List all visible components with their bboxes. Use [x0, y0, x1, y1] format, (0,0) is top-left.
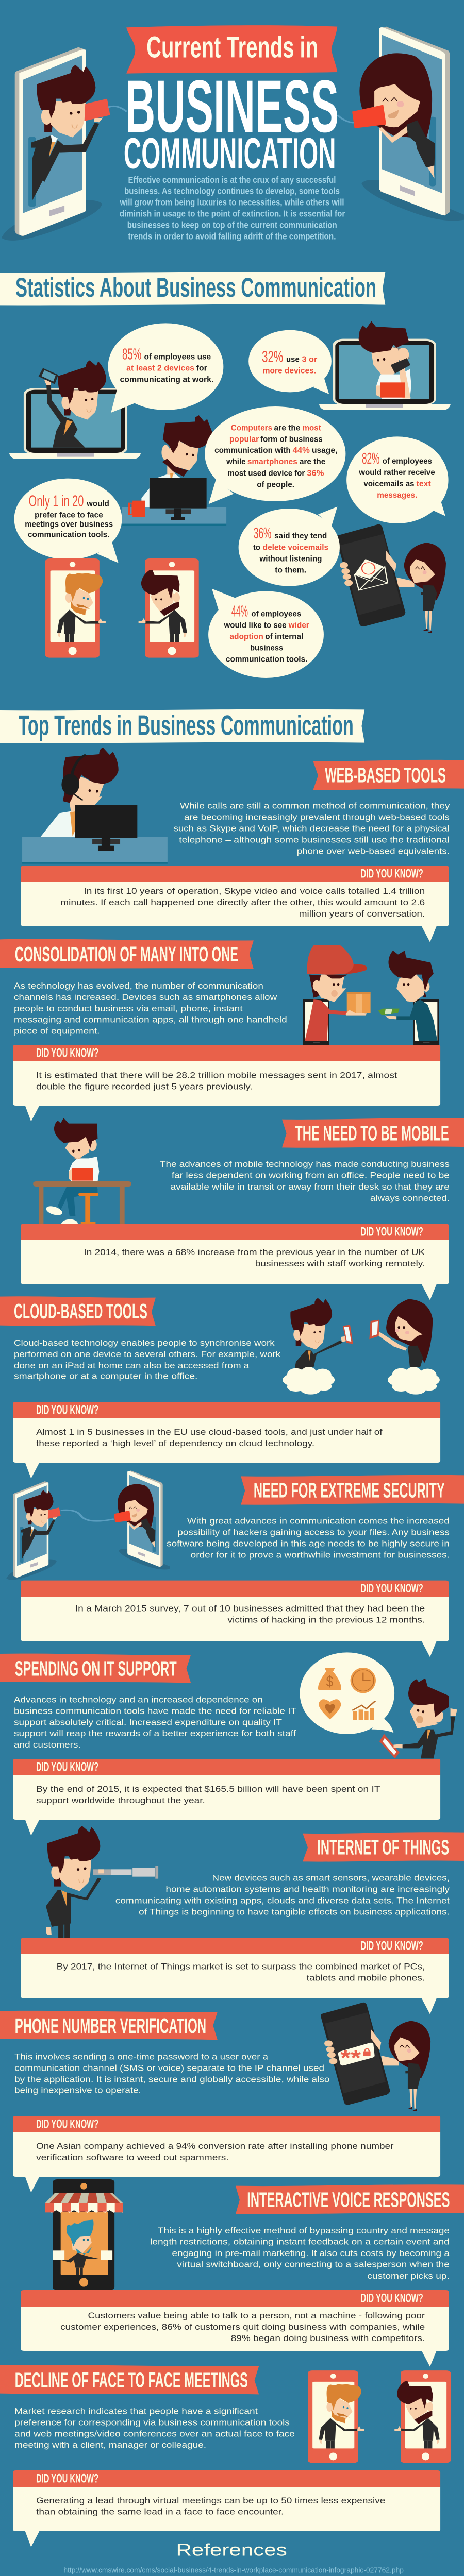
- stat bubble: computers and smartphones: are the: [300, 457, 325, 466]
- text: CLOUD-BASED TOOLS: [14, 1300, 147, 1323]
- did you know box: cloud dependency: DID YOU KNOW?: [36, 1403, 98, 1417]
- did you know box: conversion rate: [13, 2116, 440, 2193]
- did you know box: virtual meetings: DID YOU KNOW?: [36, 2471, 98, 2485]
- stat bubble: only 1 in 20: [14, 479, 122, 563]
- body text: cloud-based tools: smartphone or at a computer in the office.: [14, 1371, 197, 1381]
- stat bubble: 32%: [248, 330, 332, 394]
- body text: interactive voice responses: [150, 2226, 450, 2281]
- body text: phone number verification: being inexpensive to operate.: [14, 2086, 141, 2095]
- stat bubble: 82%: voicemails as: [363, 479, 415, 488]
- illustration: woman with giant phone and password: **: [340, 2046, 361, 2070]
- body text: security: [167, 1516, 450, 1560]
- body text: IT support: support will reap the rewards of a better experience for both staff: [14, 1728, 296, 1738]
- body text: consolidation: [14, 981, 287, 1036]
- banner: consolidation: [0, 939, 254, 969]
- stat bubble: 85%: [108, 323, 223, 413]
- stat bubble: 85%: communicating at work.: [120, 375, 213, 384]
- stat bubble: 85%: 85%: [122, 345, 141, 363]
- body text: consolidation: people to conduct business via email, phone, instant: [14, 1004, 243, 1013]
- did you know box: virtual meetings: than obtaining the same lead in a face to face encounter.: [36, 2507, 284, 2516]
- body text: consolidation: piece of equipment.: [14, 1026, 100, 1036]
- body text: internet of things: [115, 1873, 450, 1917]
- stat bubble: 44%: would like to see: [224, 620, 287, 630]
- illustration: woman with giant phone and password: [321, 2003, 430, 2111]
- stat bubble: computers and smartphones: Computers: [231, 423, 272, 432]
- title banner: [126, 25, 337, 74]
- did you know box: mobile messages: DID YOU KNOW?: [36, 1046, 98, 1060]
- did you know box: conversion rate: DID YOU KNOW?: [36, 2117, 98, 2131]
- heading banner: top trends: [0, 709, 364, 743]
- stat bubble: computers and smartphones: 44%: [293, 446, 310, 455]
- stat bubble: computers and smartphones: are the: [274, 423, 301, 432]
- illustration: man on left phone: [2, 47, 110, 241]
- banner: phone number verification: [0, 2011, 218, 2040]
- stat bubble: computers and smartphones: [205, 406, 345, 504]
- banner: cloud-based tools: [0, 1296, 156, 1326]
- stat bubble: computers and smartphones: 36%: [307, 468, 324, 478]
- stat bubble: 82%: messages.: [377, 490, 417, 500]
- stat bubble: 44%: adoption: [229, 632, 263, 641]
- stat bubble: 36%: without listening: [259, 554, 322, 563]
- body text: web-based tools: [173, 801, 450, 856]
- did you know box: mobile messages: double the figure recorded just 5 years previously.: [36, 1081, 253, 1091]
- illustration: two men on phones: [308, 2370, 451, 2463]
- stat bubble: computers and smartphones: usage,: [312, 446, 337, 455]
- body text: IT support: Advances in technology and an increased dependence on: [14, 1695, 263, 1704]
- stat bubble: computers and smartphones: while: [226, 457, 245, 466]
- stat bubble: 44%: 44%: [231, 603, 248, 620]
- illustration: man and woman on clouds sharing tablets: [283, 1298, 440, 1395]
- did you know box: mobile messages: [13, 1045, 440, 1122]
- thought bubble with money, time, heart and growth icons: $: [326, 1673, 333, 1690]
- illustration: man with telescope: [46, 1826, 158, 1938]
- laptop with man on phone: [319, 321, 451, 410]
- stat bubble: 36%: said they tend: [274, 531, 327, 540]
- body text: decline of meetings: Market research indicates that people have a significant: [14, 2406, 258, 2416]
- body text: consolidation: messaging and communication apps, all through one handheld: [14, 1014, 287, 1024]
- stat bubble: only 1 in 20: communication tools.: [28, 530, 109, 539]
- stat bubble: 85%: at least 2 devices: [126, 363, 194, 372]
- did you know box: cloud dependency: these reported a ‘high level’ of dependency on cloud technology.: [36, 1438, 314, 1448]
- stat bubble: 36%: to them.: [275, 565, 306, 574]
- stat bubble: only 1 in 20: would: [86, 499, 109, 508]
- stat bubble: computers and smartphones: form of business: [260, 434, 323, 444]
- did you know box: IoT market: [21, 1938, 449, 2014]
- did you know box: IT spending: DID YOU KNOW?: [36, 1760, 98, 1774]
- body text: IT support: business communication tools have made the need for reliable IT: [14, 1706, 296, 1716]
- stat bubble: computers and smartphones: popular: [229, 434, 259, 444]
- body text: decline of meetings: meeting with a client, manager or colleague.: [14, 2440, 206, 2450]
- did you know box: virtual meetings: [13, 2470, 440, 2547]
- stat bubble: 36%: [239, 506, 340, 586]
- body text: cloud-based tools: performed on one device to several others. For example, work: [14, 1349, 280, 1359]
- stat bubble: 32%: 32%: [262, 348, 283, 366]
- did you know box: conversion rate: verification software to weed out spammers.: [36, 2153, 229, 2162]
- illustration: man with headset at desk: [22, 748, 168, 864]
- stat bubble: 44%: communication tools.: [226, 654, 307, 664]
- did you know box: hacking: [21, 1581, 449, 1657]
- illustration: woman with giant phone and voicemail envelope: [337, 524, 446, 633]
- body text: consolidation: As technology has evolved, the number of communication: [14, 981, 263, 991]
- stat bubble: 82%: 82%: [362, 450, 379, 467]
- stat bubble: computers and smartphones: smartphones: [247, 457, 297, 466]
- body text: the need to be mobile: [160, 1159, 450, 1203]
- stat bubble: only 1 in 20: meetings over business: [25, 519, 113, 529]
- intro paragraph: [120, 175, 345, 242]
- heading: references: References: [176, 2540, 287, 2560]
- string telephone line: [108, 106, 354, 123]
- body text: phone number verification: [14, 2052, 329, 2095]
- did you know box: IT spending: [13, 1759, 440, 1836]
- stat bubble: 44%: business: [250, 643, 283, 652]
- stat bubble: 82%: [346, 436, 449, 523]
- body text: phone number verification: This involves sending a one-time password to a user over a: [14, 2052, 269, 2061]
- body text: IT support: support absolutely critical. Increased expenditure on quality IT: [14, 1718, 282, 1727]
- stat bubble: 85%: for: [196, 363, 207, 372]
- body text: cloud-based tools: Cloud-based technology enables people to synchronise work: [14, 1338, 275, 1348]
- stat bubble: 36%: to: [253, 543, 260, 552]
- did you know box: skype: [21, 866, 449, 942]
- banner: spending on IT support: [0, 1654, 191, 1683]
- did you know box: IT spending: support worldwide throughout the year.: [36, 1795, 205, 1805]
- stat bubble: 44%: wider: [288, 620, 309, 630]
- body text: cloud-based tools: done on an iPad at home can also be accessed from a: [14, 1361, 250, 1370]
- body text: consolidation: channels has increased. Devices such as smartphones allow: [14, 992, 277, 1002]
- illustration: phone shopfront with salesperson: [45, 2179, 123, 2290]
- did you know box: remote working: [21, 1224, 449, 1300]
- stat bubble: 44%: of employees: [251, 609, 301, 618]
- illustration: man at desk with tablet: [33, 1118, 131, 1224]
- body text: decline of meetings: [14, 2406, 295, 2450]
- illustration: phones with string telephone: [6, 1470, 170, 1580]
- illustration: two men on phones: [45, 558, 199, 658]
- stat bubble: 32%: more devices.: [263, 366, 316, 375]
- body text: decline of meetings: and web meetings/video conferences over an actual face to face: [14, 2429, 295, 2438]
- stat bubble: 32%: 3 or: [302, 354, 318, 364]
- body text: IT support: and customers.: [14, 1740, 81, 1750]
- thought bubble with money, time, heart and growth icons: [300, 1652, 394, 1734]
- stat bubble: computers and smartphones: communication with: [214, 446, 291, 455]
- did you know box: customer experience: [21, 2290, 449, 2367]
- body text: IT support: [14, 1695, 296, 1750]
- laptop with man holding phone: [9, 360, 141, 459]
- banner: decline of face to face meetings: [0, 2365, 259, 2394]
- stat bubble: 82%: text: [417, 479, 431, 488]
- stat bubble: 44%: [208, 589, 324, 678]
- stat bubble: only 1 in 20: Only 1 in 20: [29, 493, 84, 510]
- stat bubble: 85%: of employees use: [144, 352, 211, 361]
- stat bubble: 36%: 36%: [254, 524, 271, 542]
- stat bubble: computers and smartphones: most: [303, 423, 321, 432]
- stat bubble: computers and smartphones: most used device for: [227, 468, 305, 478]
- stat bubble: 32%: use: [286, 354, 300, 364]
- stat bubble: only 1 in 20: prefer face to face: [35, 510, 103, 519]
- body text: decline of meetings: preference for corresponding via business communication tools: [14, 2418, 290, 2427]
- illustration: man with tablet: [379, 1678, 457, 1758]
- illustration: delivery person and customer on phones: [303, 945, 439, 1045]
- stat bubble: 44%: of internal: [265, 632, 303, 641]
- did you know box: cloud dependency: [13, 1402, 440, 1479]
- desk with bearded man at monitor: [122, 415, 226, 526]
- body text: cloud-based tools: [14, 1338, 280, 1381]
- illustration: woman on right phone: [352, 27, 464, 221]
- stat bubble: computers and smartphones: of people.: [257, 480, 294, 489]
- stat bubble: 36%: delete voicemails: [263, 543, 328, 552]
